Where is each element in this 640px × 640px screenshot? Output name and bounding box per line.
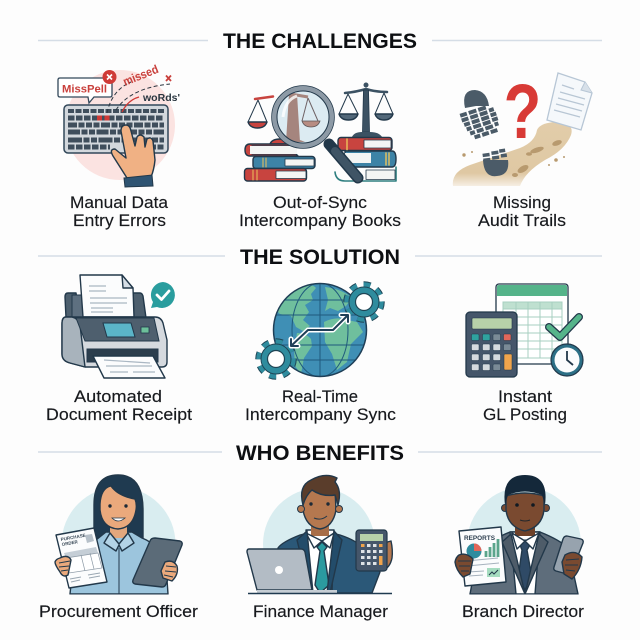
caption [478,194,566,230]
icon: typing hand [111,125,155,187]
caption: GL Posting [483,406,567,424]
icon: boot prints, question mark and document [453,68,592,186]
caption [70,194,169,230]
icon: scanner body [62,317,167,367]
panel: missing audit trails [453,68,592,230]
icon: purchase order [56,528,107,588]
arrow: two-way sync [291,315,348,346]
icon: lower boot print [482,148,508,176]
panel: branch director [455,475,585,621]
icon: tablet [133,538,182,587]
icon: scales, books and magnifier [244,82,396,181]
caption: Finance Manager [253,603,389,621]
icon: left hand [455,554,473,577]
caption: Real-Time [282,388,358,406]
icon: spreadsheet, calculator, check and clock [466,284,583,377]
icon: left scale pan [248,96,273,128]
panel: instant gl posting [466,284,583,424]
icon: left hand [55,556,71,576]
label: words: woRds' [142,92,180,104]
caption: Out-of-Sync [273,194,367,212]
panel: who benefits section [39,442,585,621]
icon: purchase order: ORDER [61,539,79,547]
caption: Document Receipt [46,406,192,424]
caption: Procurement Officer [39,603,199,621]
icon: paper output [93,356,165,378]
icon: left book stack [244,139,315,181]
icon: question mark: ? [504,68,541,155]
icon: footprints in the sand [462,139,565,177]
caption: Automated [74,388,162,406]
callout: misspell: MissPell [62,84,107,96]
caption: Missing [493,194,551,212]
icon: upper gear [347,285,381,319]
caption [245,388,396,424]
panel: procurement officer [39,475,199,621]
caption: Branch Director [462,603,585,621]
panel: manual data entry errors [58,62,180,230]
caption [483,388,567,424]
icon: woman with purchase order and tablet [55,475,182,601]
icon: right book stack [335,138,396,181]
icon: spreadsheet [496,284,568,364]
panel: the challenges section [58,30,592,230]
icon: teal check badge [151,282,175,308]
icon: right hand [562,552,582,579]
icon: globe [272,283,368,377]
caption [239,194,401,230]
heading: the solution: THE SOLUTION [240,246,400,269]
icon: purchase order: PURCHASE [60,533,86,542]
heading: the challenges: THE CHALLENGES [223,30,417,53]
caption [46,388,192,424]
icon: man with report and phone [455,475,583,601]
panel: out-of-sync intercompany books [239,82,401,230]
icon: upper boot print [460,90,502,141]
icon: hand holding calculator [382,541,392,571]
icon: clock [551,344,583,376]
icon: report: REPORTS [464,535,496,542]
label: missed: missed [121,62,160,89]
icon: man with laptop and calculator [247,475,392,600]
icon: phone [554,536,583,574]
icon: globe with gears and sync arrow [259,283,381,377]
icon: red cross [166,76,171,81]
heading: who benefits: WHO BENEFITS [236,442,404,465]
caption: Entry Errors [73,212,166,230]
caption: Audit Trails [478,212,566,230]
icon: laptop [247,549,392,594]
icon: document [547,73,592,130]
icon: lower gear [259,342,293,376]
icon: magnifying glass [272,86,358,178]
panel: the solution section [46,246,583,424]
caption: Intercompany Sync [245,406,396,424]
panel: finance manager [247,475,392,621]
icon: paper feeding in [80,275,134,317]
caption: Manual Data [70,194,169,212]
panel: real-time intercompany sync [245,283,396,424]
icon: document scanner [62,275,175,378]
icon: calculator [466,312,517,377]
icon: sand trail [453,122,572,186]
icon: green check mark [549,317,579,337]
panel: automated document receipt [46,275,192,424]
icon: calculator [356,530,387,571]
icon: right hand [161,561,177,581]
icon: right scale [339,82,393,137]
icon: keyboard with typing errors [58,62,180,187]
caption: Instant [498,388,552,406]
caption: Intercompany Books [239,212,401,230]
